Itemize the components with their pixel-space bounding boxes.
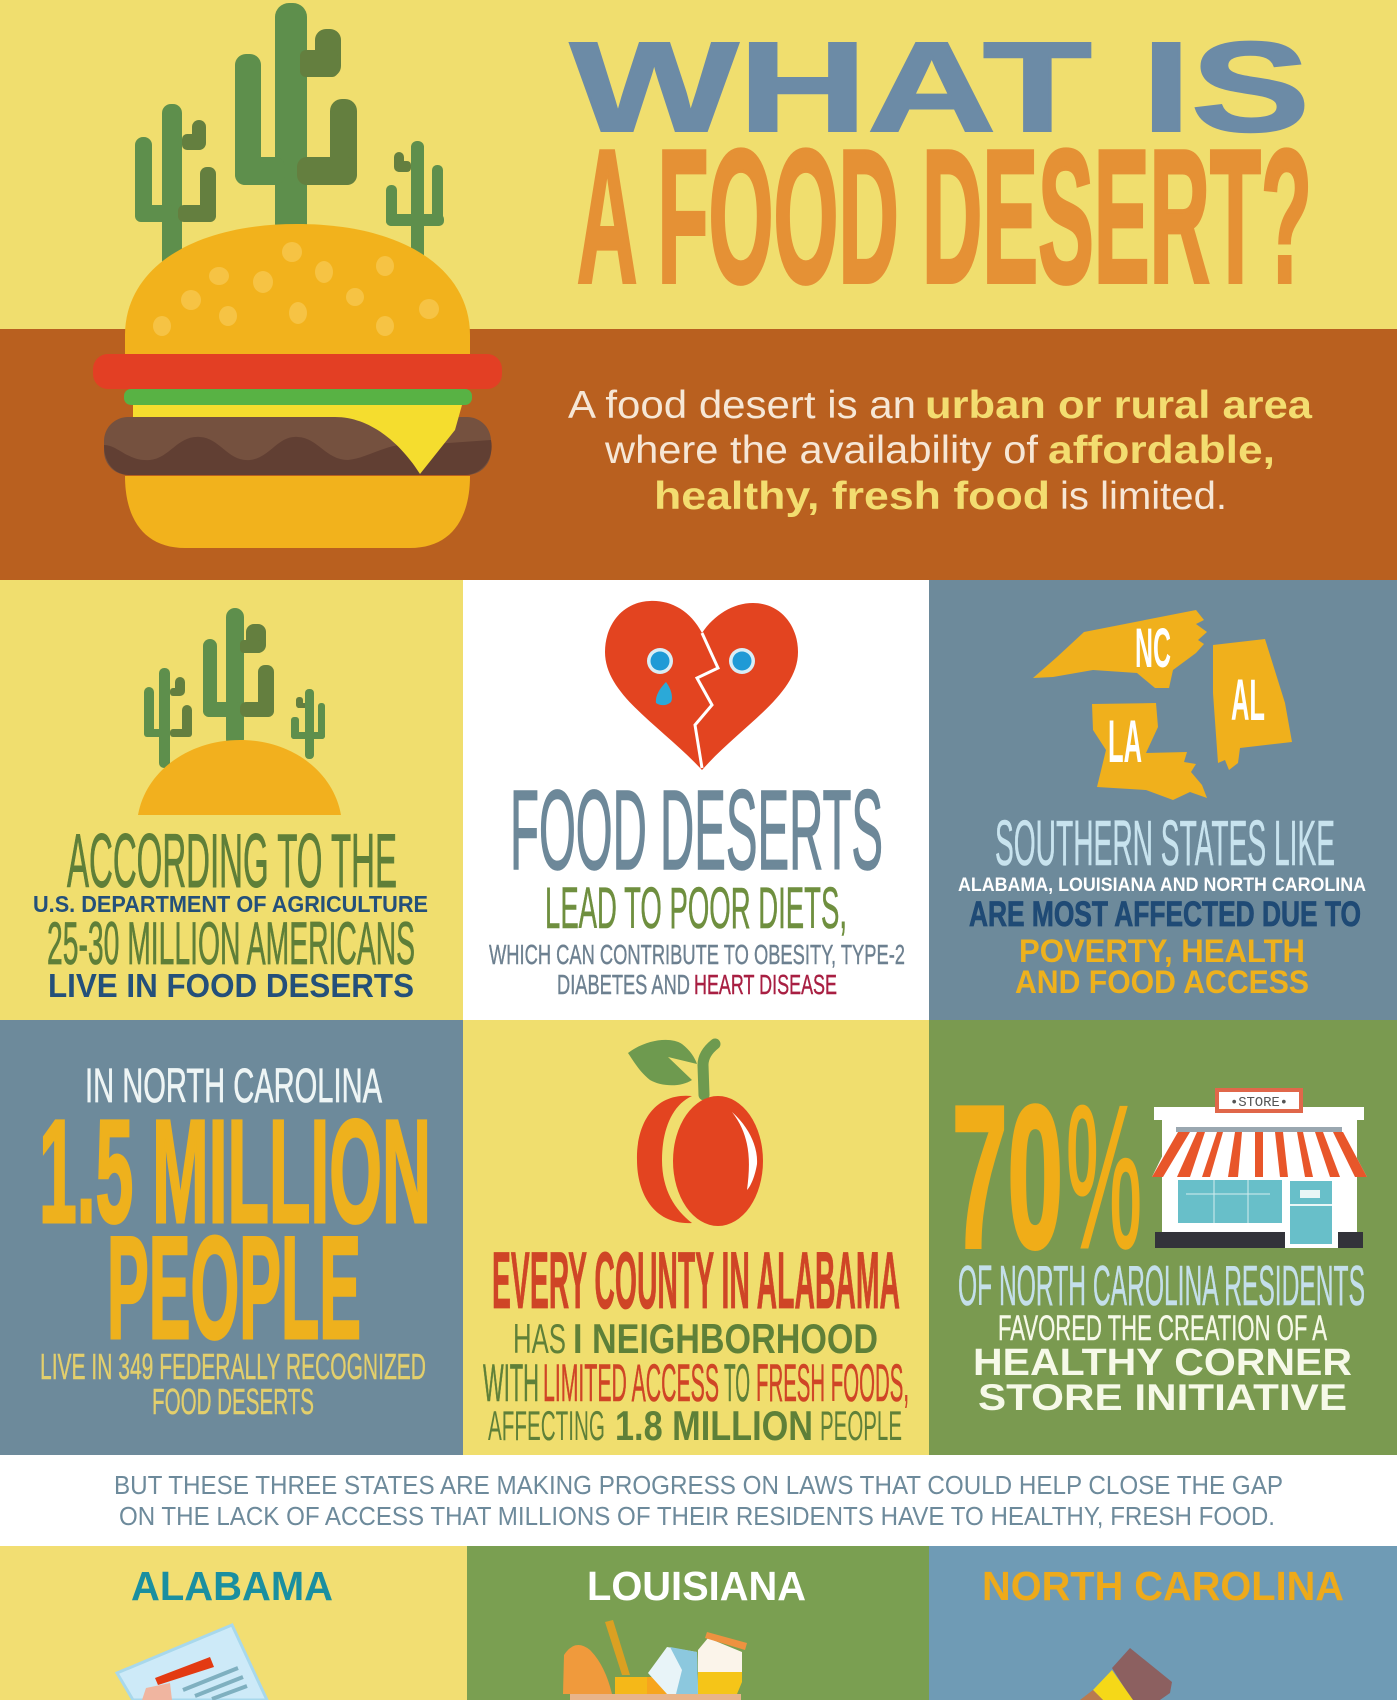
text: consequences: WHICH CAN CONTRIBUTE TO OBESITY, TYPE-2 <box>489 939 905 970</box>
text: USDA: U.S. DEPARTMENT OF AGRICULTURE <box>33 891 428 917</box>
text block: definition: healthy, fresh food <box>654 475 1050 518</box>
text: live in food deserts: LIVE IN FOOD DESERTS <box>48 967 414 1004</box>
text: has 1 neighborhood: I NEIGHBORHOOD <box>573 1315 878 1362</box>
panel: southern states: AL <box>1231 668 1265 733</box>
label: store sign: •STORE• <box>1230 1095 1288 1111</box>
panel: southern states: LA <box>1108 708 1142 775</box>
heading: North Carolina: NORTH CAROLINA <box>982 1563 1344 1609</box>
text: federally recognized: FOOD DESERTS <box>152 1381 314 1422</box>
icon: large cacti behind burger <box>135 3 444 269</box>
text block: definition: affordable, <box>1048 429 1275 472</box>
icon: crying broken heart <box>605 601 798 770</box>
panel: according to USDA: 25-30 MILLION AMERICANS <box>47 910 415 977</box>
text block: definition: urban or rural area <box>925 384 1312 427</box>
text: FOOD DESERTS <box>510 767 883 893</box>
panel: North Carolina stat <box>0 1020 463 1455</box>
text: poverty health: POVERTY, HEALTH <box>1019 933 1305 969</box>
text block: progress statement: BUT THESE THREE STATES ARE MAKING PROGRESS ON LAWS THAT COULD HELP CLOSE THE GAP <box>114 1470 1283 1500</box>
panel: Louisiana <box>467 1546 929 1700</box>
text: in North Carolina: IN NORTH CAROLINA <box>85 1060 382 1113</box>
text: affecting 1.8 million: 1.8 MILLION <box>615 1402 813 1449</box>
text: store initiative: STORE INITIATIVE <box>978 1377 1347 1418</box>
panel: according to USDA <box>0 580 463 1020</box>
text: limited access: LIMITED ACCESS <box>543 1354 719 1413</box>
icon: gavel <box>1080 1648 1172 1700</box>
text block: definition: A food desert is an <box>568 384 916 427</box>
panel: poor diets <box>463 580 929 1020</box>
text: food access: AND FOOD ACCESS <box>1015 964 1309 1000</box>
panel: North Carolina stat: PEOPLE <box>107 1206 361 1369</box>
panel: North Carolina <box>929 1546 1397 1700</box>
text: limited access: WITH <box>483 1354 539 1413</box>
icon: store <box>1152 1088 1367 1248</box>
icon: cacti on dune <box>138 608 341 815</box>
panel: Alabama stat: PEOPLE <box>820 1402 902 1449</box>
text block: definition: where the availability of <box>604 429 1038 472</box>
icon: document and hand <box>117 1625 267 1700</box>
text block: progress statement <box>0 1455 1397 1546</box>
panel: Alabama <box>0 1546 467 1700</box>
text: limited access: TO <box>724 1354 750 1413</box>
text block: definition: is limited. <box>1060 475 1227 518</box>
heading: Louisiana: LOUISIANA <box>587 1563 806 1609</box>
text: consequences: DIABETES AND <box>557 969 690 1000</box>
icon: apple <box>628 1040 763 1226</box>
text: federally recognized <box>40 1346 426 1422</box>
text: affecting 1.8 million: AFFECTING <box>488 1402 605 1449</box>
title: WHAT IS: WHAT IS <box>570 16 1310 159</box>
panel: southern states <box>929 580 1397 1020</box>
icon: burger <box>93 224 502 548</box>
text: consequences <box>489 939 905 1000</box>
panel: poor diets: LEAD TO POOR DIETS, <box>545 876 847 941</box>
icon: state maps <box>1033 610 1292 800</box>
icon: grocery bag <box>563 1620 747 1700</box>
panel: southern states: NC <box>1135 616 1171 679</box>
text: healthy corner: HEALTHY CORNER <box>973 1342 1352 1384</box>
stat: 70 percent: 70 <box>952 1064 1063 1291</box>
panel: corner store: % <box>1066 1064 1142 1291</box>
text: state names: ALABAMA, LOUISIANA AND NORTH CAROLINA <box>958 875 1366 896</box>
text block: definition <box>568 384 1312 518</box>
text: federally recognized: LIVE IN 349 FEDERALLY RECOGNIZED <box>40 1346 426 1387</box>
text: has 1 neighborhood: HAS <box>513 1315 566 1362</box>
heading: Alabama: ALABAMA <box>131 1563 333 1609</box>
text: consequences: HEART DISEASE <box>694 969 837 1000</box>
text block: progress statement: ON THE LACK OF ACCESS THAT MILLIONS OF THEIR RESIDENTS HAVE TO HEALTHY, FRESH FOOD. <box>119 1501 1275 1531</box>
text: 1.5 MILLION <box>39 1090 431 1254</box>
panel: header <box>0 0 1397 580</box>
panel: Alabama stat <box>463 1020 929 1455</box>
panel: corner store <box>929 1020 1397 1455</box>
text: affecting 1.8 million <box>488 1402 902 1449</box>
text: FRESH FOODS, <box>756 1354 909 1413</box>
panel: according to USDA: ACCORDING TO THE <box>67 819 397 904</box>
